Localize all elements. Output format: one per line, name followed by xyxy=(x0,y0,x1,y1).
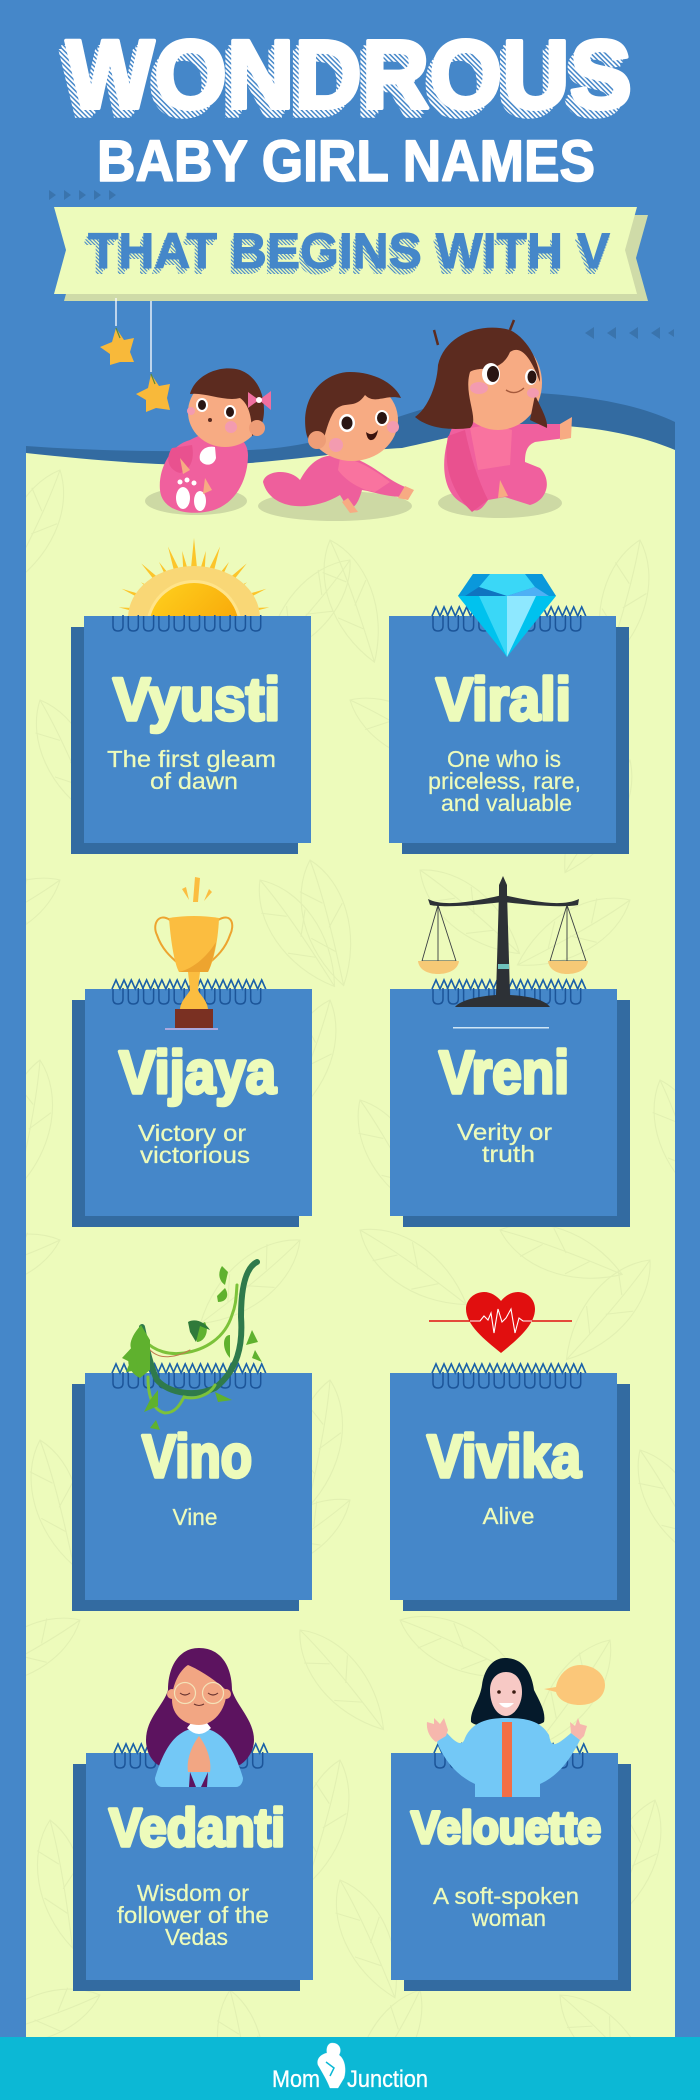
cream content panel xyxy=(26,425,675,2037)
decorative triangles right xyxy=(585,327,674,339)
name: Virali xyxy=(436,666,571,733)
description: One who is xyxy=(447,746,561,772)
heading: baby girl names: BABY GIRL NAMES xyxy=(97,129,595,194)
panel: virali xyxy=(389,574,629,854)
panel: vivika xyxy=(390,1292,630,1611)
description: Victory or xyxy=(138,1120,246,1146)
description: The first gleam xyxy=(107,746,276,772)
description: of dawn xyxy=(150,768,238,794)
description: Verity or xyxy=(457,1119,552,1145)
name: Vivika xyxy=(427,1423,582,1490)
baby three sitting xyxy=(415,320,572,518)
panel: vijaya xyxy=(72,877,312,1227)
panel: vreni xyxy=(390,876,630,1227)
description: woman xyxy=(471,1905,546,1931)
panel: vino xyxy=(72,1262,312,1611)
icon: speaking woman xyxy=(427,1658,605,1797)
baby two crawling xyxy=(258,372,414,521)
title: wondrous: WONDROUS xyxy=(59,29,625,138)
icon: vine xyxy=(122,1262,262,1430)
icon: diamond xyxy=(458,574,556,657)
panel: vedanti xyxy=(73,1648,313,1991)
description: Alive xyxy=(482,1503,534,1529)
icon: praying girl xyxy=(146,1648,254,1787)
name: Vijaya xyxy=(119,1039,277,1106)
description: victorious xyxy=(140,1142,250,1168)
icon: trophy xyxy=(155,877,232,1030)
title: wondrous: WONDROUS xyxy=(66,20,632,129)
icon: heart with pulse xyxy=(429,1292,572,1353)
description: Wisdom or xyxy=(137,1880,249,1906)
name: Vedanti xyxy=(109,1798,285,1858)
description: priceless, rare, xyxy=(428,768,581,794)
description: and valuable xyxy=(441,790,572,816)
footer bar xyxy=(0,2037,700,2100)
icon: balance scale xyxy=(418,876,588,1007)
title: wondrous: WONDROUS xyxy=(62,25,628,134)
background leaf pattern xyxy=(0,461,700,2100)
dark wave band xyxy=(26,392,675,500)
name: Vyusti xyxy=(113,666,280,733)
panel: velouette xyxy=(391,1658,631,1991)
footer logo: momjunction: Mom xyxy=(272,2066,320,2093)
hanging stars xyxy=(100,298,170,412)
decorative triangles left xyxy=(49,190,116,200)
banner text: THAT BEGINS WITH V xyxy=(84,229,609,285)
description: A soft-spoken xyxy=(433,1883,579,1909)
panel: vyusti xyxy=(71,538,311,854)
name: Vino xyxy=(142,1423,252,1490)
icon: sun xyxy=(118,538,270,676)
name: Velouette xyxy=(411,1802,601,1853)
description: truth xyxy=(482,1141,535,1167)
banner text: THAT BEGINS WITH V xyxy=(88,223,611,279)
banner xyxy=(54,207,648,301)
footer logo: momjunction xyxy=(272,2043,428,2093)
description: Vine xyxy=(172,1504,218,1530)
description: Vedas xyxy=(165,1924,228,1950)
name: Vreni xyxy=(439,1039,569,1106)
baby one sitting xyxy=(145,368,271,515)
footer logo: momjunction: Junction xyxy=(347,2066,428,2093)
description: follower of the xyxy=(117,1902,269,1928)
banner text: THAT BEGINS WITH V xyxy=(86,226,611,282)
